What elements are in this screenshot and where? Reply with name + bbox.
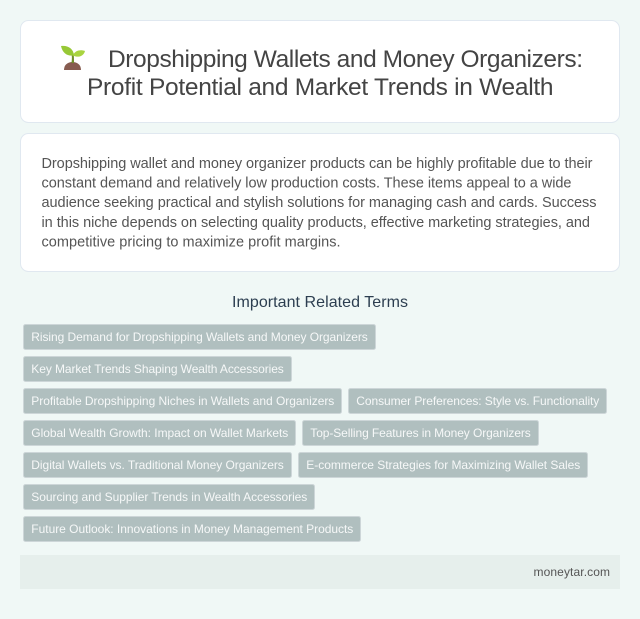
- tag: consumer preferences: [348, 388, 606, 414]
- tag: profitable niches: Profitable Dropshipping Niches in Wallets and Organizers: [31, 394, 334, 408]
- tag group: [24, 324, 606, 542]
- footer source text: moneytar.com: [534, 565, 610, 579]
- tag: top-selling features: [302, 420, 538, 446]
- title: Dropshipping Wallets and Money Organizers:: [108, 46, 583, 73]
- footer: [20, 555, 620, 589]
- icon: seedling: [61, 46, 85, 70]
- description text: audience seeking practical and stylish solutions for managing cash and cards. Success: [42, 195, 596, 211]
- tag: future outlook: Future Outlook: Innovations in Money Management Products: [31, 522, 353, 536]
- panel: description: [20, 134, 620, 272]
- tag: global wealth growth: [24, 420, 296, 446]
- tag: digital wallets: Digital Wallets vs. Traditional Money Organizers: [31, 458, 284, 472]
- tag: key market trends: Key Market Trends Shaping Wealth Accessories: [31, 362, 284, 376]
- tag: global wealth growth: Global Wealth Growth: Impact on Wallet Markets: [31, 426, 288, 440]
- tag: key market trends: [24, 356, 292, 382]
- tag: future outlook: [24, 516, 360, 542]
- tag: consumer preferences: Consumer Preferences: Style vs. Functionality: [356, 394, 599, 408]
- tag: sourcing and supplier trends: [24, 484, 314, 510]
- description text: Dropshipping wallet and money organizer products can be highly profitable due to their: [42, 156, 593, 172]
- tag: rising demand: [24, 324, 376, 350]
- description text: [42, 156, 596, 250]
- title: Profit Potential and Market Trends in Wealth: [87, 74, 554, 101]
- tag: e-commerce strategies: [298, 452, 588, 478]
- tag: e-commerce strategies: E-commerce Strategies for Maximizing Wallet Sales: [306, 458, 580, 472]
- description text: in this niche depends on selecting quality products, effective marketing strategies, and: [42, 215, 590, 231]
- description text: competitive pricing to maximize profit margins.: [42, 234, 340, 250]
- tag: rising demand: Rising Demand for Dropshipping Wallets and Money Organizers: [31, 330, 368, 344]
- tag: digital wallets: [24, 452, 292, 478]
- panel: title card: [20, 20, 620, 122]
- tag: sourcing and supplier trends: Sourcing and Supplier Trends in Wealth Accessories: [31, 490, 307, 504]
- heading: important related terms: Important Related Terms: [232, 294, 408, 311]
- tag: top-selling features: Top-Selling Features in Money Organizers: [310, 426, 531, 440]
- title: [87, 46, 583, 101]
- description text: constant demand and relatively low production costs. These items appeal to a wide: [42, 176, 572, 192]
- tag: profitable niches: [24, 388, 342, 414]
